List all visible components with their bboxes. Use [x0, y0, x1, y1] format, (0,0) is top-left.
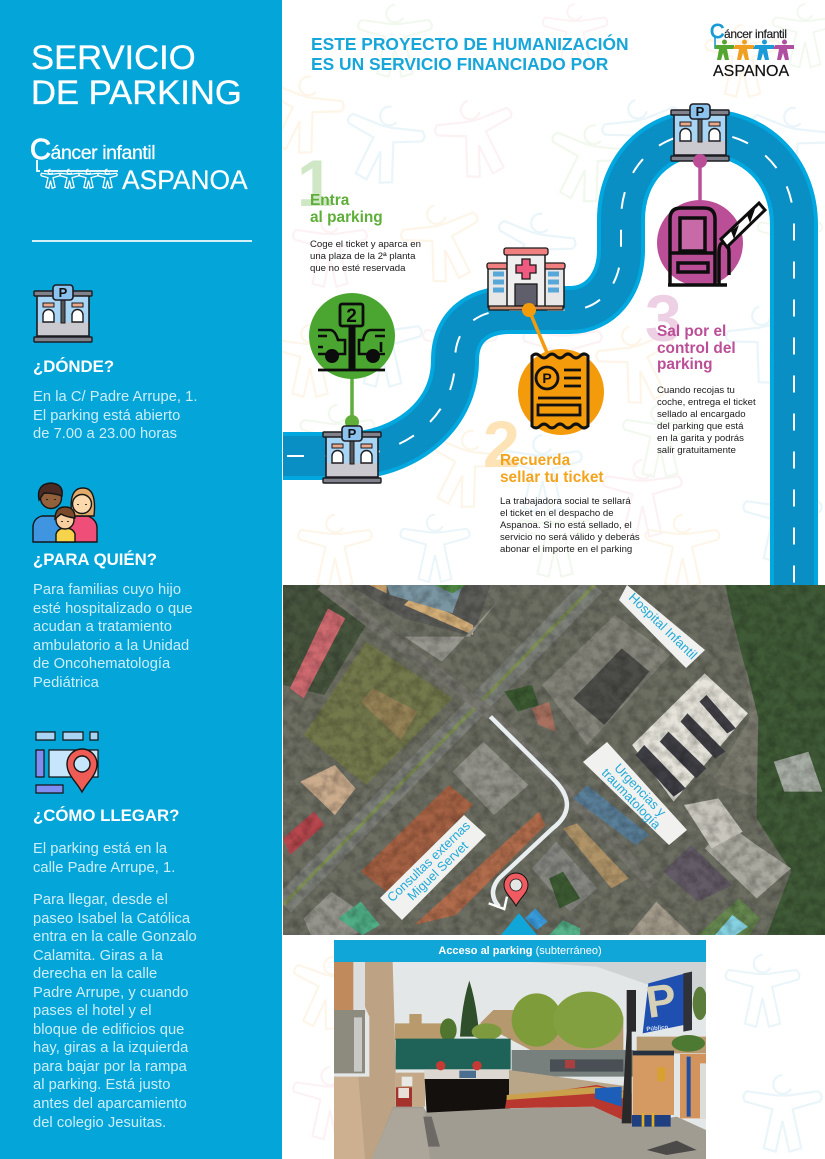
step 3 heading: [657, 323, 736, 373]
ramp wall: [509, 1070, 630, 1123]
label: Consultas externas Miguel Servet: [380, 815, 486, 920]
heading: para quien: ¿PARA QUIÉN?: [33, 550, 157, 569]
logo: Cancer infantil Aspanoa, colour: [710, 21, 794, 80]
photo: parking entrance: [334, 962, 706, 1159]
text: para quien: Para familias cuyo hijo: [33, 582, 181, 598]
logo: Cáncer infantil Aspanoa, white: [30, 134, 248, 195]
heading: funding: ES UN SERVICIO FINANCIADO POR: [311, 54, 608, 74]
text: directions: del colegio Jesuitas.: [33, 1115, 166, 1131]
step 2 number: 2: [483, 407, 520, 481]
label: Urgencias y traumatologia: Urgencias y: [611, 760, 670, 820]
icon: parking building on road, exit: [670, 103, 730, 162]
text: como llegar: El parking está en la: [33, 841, 167, 857]
label: Urgencias y traumatologia: [583, 742, 687, 845]
text: para quien: esté hospitalizado o que: [33, 601, 193, 617]
step 2 text: Aspanoa. Si no está sellado, el: [500, 520, 632, 531]
step 3 heading: Sal por el: [657, 323, 726, 340]
step 3: connector and purple circle with barrier icon: [657, 154, 767, 287]
step 1: connector and green circle with parking level icon: [309, 293, 395, 426]
icon: family: [32, 482, 98, 543]
step 3 text: Cuando recojas tu: [657, 385, 735, 396]
text: directions: bloque de edificios que: [33, 1022, 184, 1038]
step 2 heading: [500, 452, 604, 486]
text: como llegar: calle Padre Arrupe, 1.: [33, 860, 175, 876]
trees: [460, 981, 479, 1037]
icon: hospital: [486, 247, 566, 311]
step 1 heading: al parking: [310, 209, 383, 226]
step 3 text: sellado al encargado: [657, 409, 746, 420]
forest: [725, 585, 825, 935]
text: donde: [33, 389, 198, 442]
step 1 heading: [310, 192, 383, 226]
text: directions: paseo Isabel la Católica: [33, 911, 190, 927]
text: donde: de 7.00 a 23.00 horas: [33, 426, 177, 442]
aerial map: [283, 585, 825, 935]
step 2: connector and orange circle with ticket icon: [518, 303, 604, 435]
text: directions: hay, giras a la izquierda: [33, 1040, 188, 1056]
label: Hospital Infantil: Hospital Infantil: [626, 590, 700, 662]
title: SERVICIO: [31, 39, 196, 77]
text: para quien: ambulatorio a la Unidad: [33, 638, 189, 654]
consultas buildings: [361, 785, 473, 892]
photo: parking entrance: Público: [646, 1025, 669, 1033]
pointer triangle: [501, 913, 537, 935]
divider line: [32, 240, 252, 242]
avenue: [283, 585, 594, 905]
pillars: [633, 1054, 674, 1115]
background pattern of children figures: [282, 4, 825, 1153]
text: directions: antes del aparcamiento: [33, 1096, 187, 1112]
step 3 text: del parking que está: [657, 421, 743, 432]
icon: parking building on road, start: [322, 425, 382, 484]
text: directions: para bajar por la rampa: [33, 1059, 187, 1075]
step 3 text: en la garita y podrás: [657, 433, 744, 444]
heading: funding: [311, 34, 629, 74]
P sign: [622, 990, 636, 1123]
step 2 text: el ticket en el despacho de: [500, 508, 614, 519]
text: directions: al parking. Está justo: [33, 1077, 170, 1093]
text: directions: [33, 892, 197, 1131]
step 3 heading: parking: [657, 356, 713, 373]
label: Consultas externas Miguel Servet: Consultas externas: [384, 818, 473, 905]
text: para quien: acudan a tratamiento: [33, 619, 172, 635]
left sidebar panel: [0, 0, 282, 1159]
route arrow: [490, 717, 567, 907]
text: donde: En la C/ Padre Arrupe, 1.: [33, 389, 198, 405]
emergency roof: [632, 673, 748, 802]
title: [31, 39, 242, 112]
step 3 text: salir gratuitamente: [657, 445, 736, 456]
logo: Cáncer infantil Aspanoa, white: ASPANOA: [122, 165, 248, 195]
garden: [304, 642, 452, 785]
step 2 heading: Recuerda: [500, 452, 570, 469]
step 2 text: La trabajadora social te sellará: [500, 496, 631, 507]
title: DE PARKING: [31, 74, 242, 112]
text: para quien: [33, 582, 193, 691]
text: directions: Para llegar, desde el: [33, 892, 168, 908]
text: donde: El parking está abierto: [33, 408, 180, 424]
text: directions: Padre Arrupe, y cuando: [33, 985, 188, 1001]
background buildings: [395, 1014, 443, 1040]
step 1: connector and green circle with parking level icon: 2: [346, 306, 357, 327]
text: directions: derecha en la calle: [33, 966, 157, 982]
logo: Cancer infantil Aspanoa, colour: Cáncer infantil: [710, 21, 786, 43]
text: como llegar: [33, 841, 175, 876]
label: Urgencias y traumatologia: traumatología: [599, 765, 665, 833]
step 1 text: que no esté reservada: [310, 263, 405, 274]
heading: como llegar: ¿CÓMO LLEGAR?: [33, 806, 179, 825]
step 2 heading: sellar tu ticket: [500, 469, 604, 486]
road: [283, 109, 818, 585]
cars and fence behind: [512, 1050, 633, 1077]
text: directions: Calamita. Giras a la: [33, 948, 163, 964]
heading: donde: ¿DÓNDE?: [33, 357, 114, 376]
bottom buildings: [705, 825, 791, 898]
caption bar: [334, 940, 706, 962]
left building: [334, 962, 367, 1010]
grey roof: [452, 742, 528, 815]
step 2 text: abonar el importe en el parking: [500, 544, 632, 555]
step 2: connector and orange circle with ticket icon: P: [542, 370, 552, 386]
text: para quien: Pediátrica: [33, 675, 99, 691]
tunnel facade: [396, 1039, 511, 1069]
step 3 text: coche, entrega el ticket: [657, 397, 756, 408]
heading: funding: ESTE PROYECTO DE HUMANIZACIÓN: [311, 34, 629, 54]
step 3 heading: control del: [657, 340, 736, 357]
step 1 number: 1: [297, 146, 334, 220]
step 1 heading: Entra: [310, 192, 349, 209]
hospital block: [542, 615, 670, 745]
step 1 text: [310, 239, 421, 274]
logo: Cancer infantil Aspanoa, colour: ASPANOA: [713, 63, 789, 80]
step 3 number: 3: [645, 281, 682, 355]
text: directions: pases el hotel y el: [33, 1003, 152, 1019]
pavement: [372, 1107, 706, 1159]
step 1 text: Coge el ticket y aparca en: [310, 239, 421, 250]
step 1 text: una plaza de la 2ª planta: [310, 251, 415, 262]
text: para quien: de Oncohematología: [33, 656, 170, 672]
step 2 text: servicio no será válido y deberás: [500, 532, 640, 543]
step 3 text: [657, 385, 756, 456]
icon: map with pin: [35, 731, 99, 794]
pink building: [290, 608, 345, 698]
icon: parking building: [33, 284, 93, 343]
caption bar: Acceso al parking (subterráneo): [438, 945, 602, 957]
logo: Cáncer infantil Aspanoa, white: Cáncer infantil: [30, 134, 155, 166]
photo: parking entrance: P: [643, 973, 679, 1028]
text: directions: entra en la calle Gonzalo: [33, 929, 197, 945]
label: Consultas externas Miguel Servet: Miguel Servet: [404, 838, 471, 903]
icon: location pin: [504, 872, 528, 907]
step 2 text: [500, 496, 640, 555]
